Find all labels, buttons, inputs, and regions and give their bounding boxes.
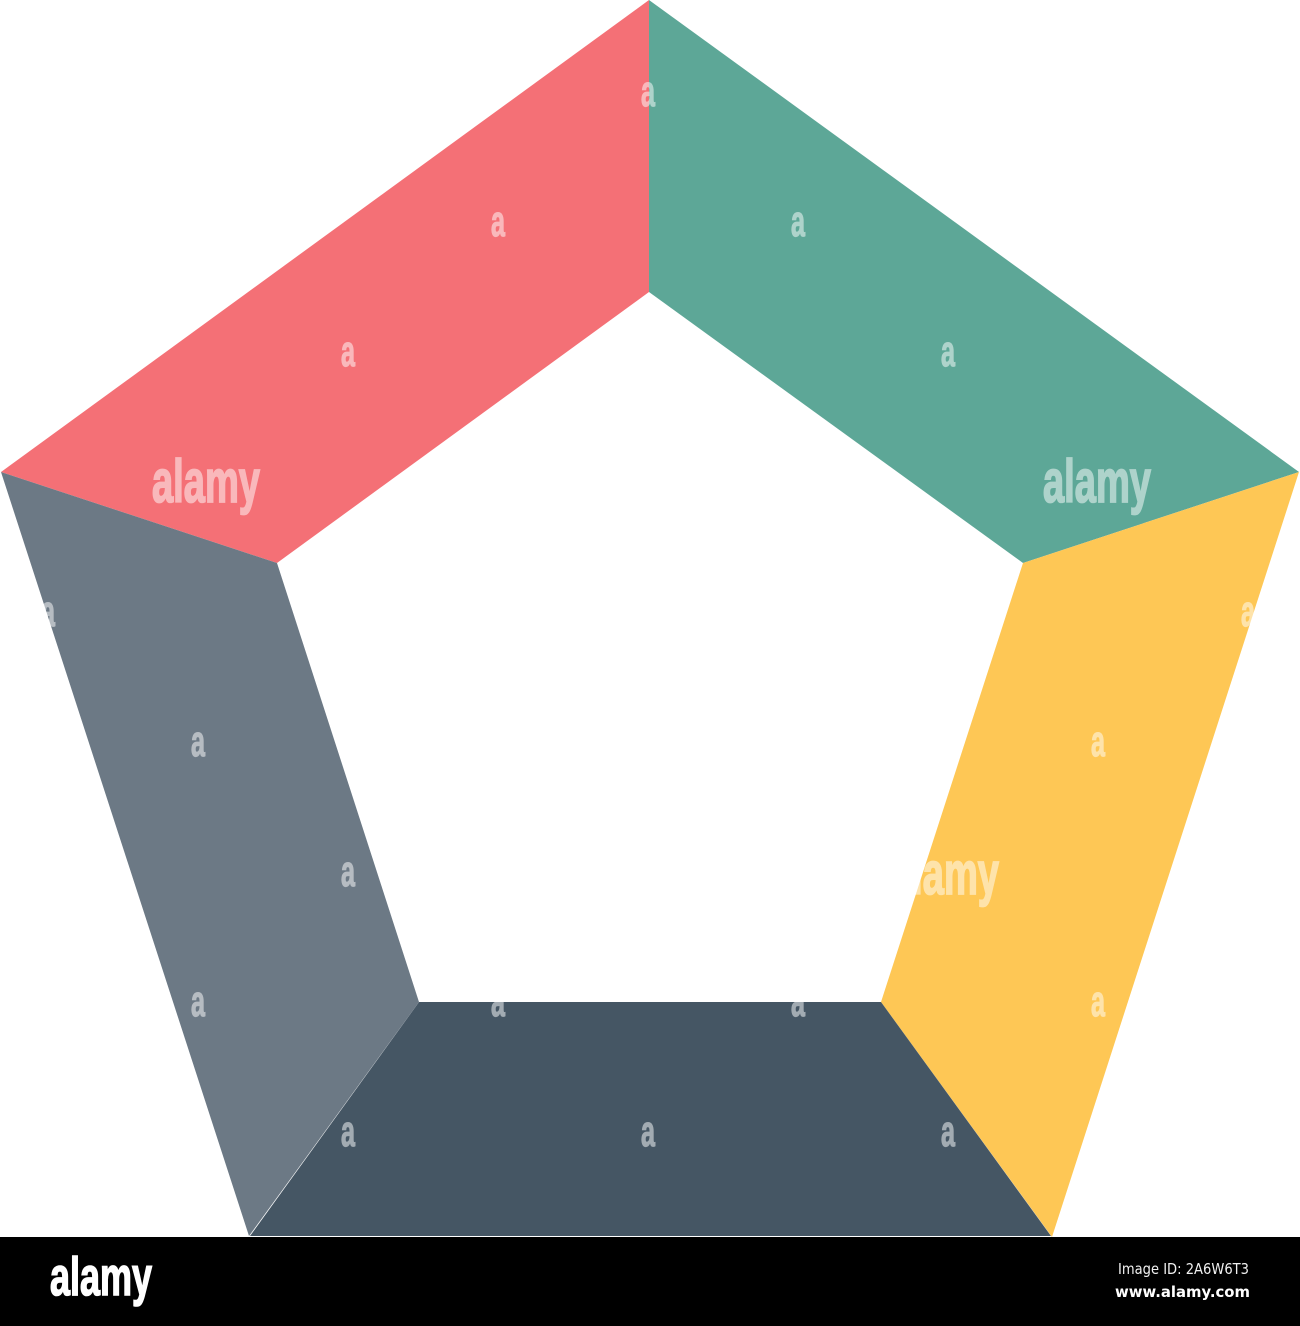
segment: yellow right (881, 472, 1299, 1237)
watermark: repeated alamy marks: a (641, 1107, 655, 1156)
website: www.alamy.com (1115, 1283, 1250, 1301)
segment: red top left (1, 0, 649, 563)
watermark: repeated alamy marks: a (341, 327, 355, 376)
image id: Image ID: 2A6W6T3 (1118, 1260, 1249, 1278)
watermark: repeated alamy marks: a (491, 197, 505, 246)
watermark: repeated alamy marks: a (791, 197, 805, 246)
watermark: repeated alamy marks: a (941, 327, 955, 376)
watermark: repeated alamy marks: alamy (1043, 448, 1151, 515)
watermark: repeated alamy marks: a (341, 1107, 355, 1156)
watermark: repeated alamy marks: alamy (152, 448, 260, 515)
watermark: repeated alamy marks: a (1091, 717, 1105, 766)
watermark: repeated alamy marks: a (1091, 977, 1105, 1026)
segment: dark slate bottom (250, 1002, 1051, 1236)
watermark: repeated alamy marks: alamy (891, 840, 999, 907)
watermark: repeated alamy marks: a (791, 977, 805, 1026)
watermark: repeated alamy marks: a (641, 67, 655, 116)
watermark: repeated alamy marks: a (191, 717, 205, 766)
watermark: repeated alamy marks: a (1241, 587, 1255, 636)
watermark: repeated alamy marks: a (341, 847, 355, 896)
watermark: repeated alamy marks: a (491, 977, 505, 1026)
watermark: repeated alamy marks (41, 67, 1255, 1156)
watermark: repeated alamy marks: a (941, 1107, 955, 1156)
watermark: repeated alamy marks: a (191, 977, 205, 1026)
footer bar (0, 1237, 1300, 1326)
segment: green top right (649, 0, 1299, 563)
segment: grey left (1, 472, 419, 1236)
watermark: repeated alamy marks: a (41, 587, 55, 636)
footer logo: alamy (50, 1247, 152, 1307)
